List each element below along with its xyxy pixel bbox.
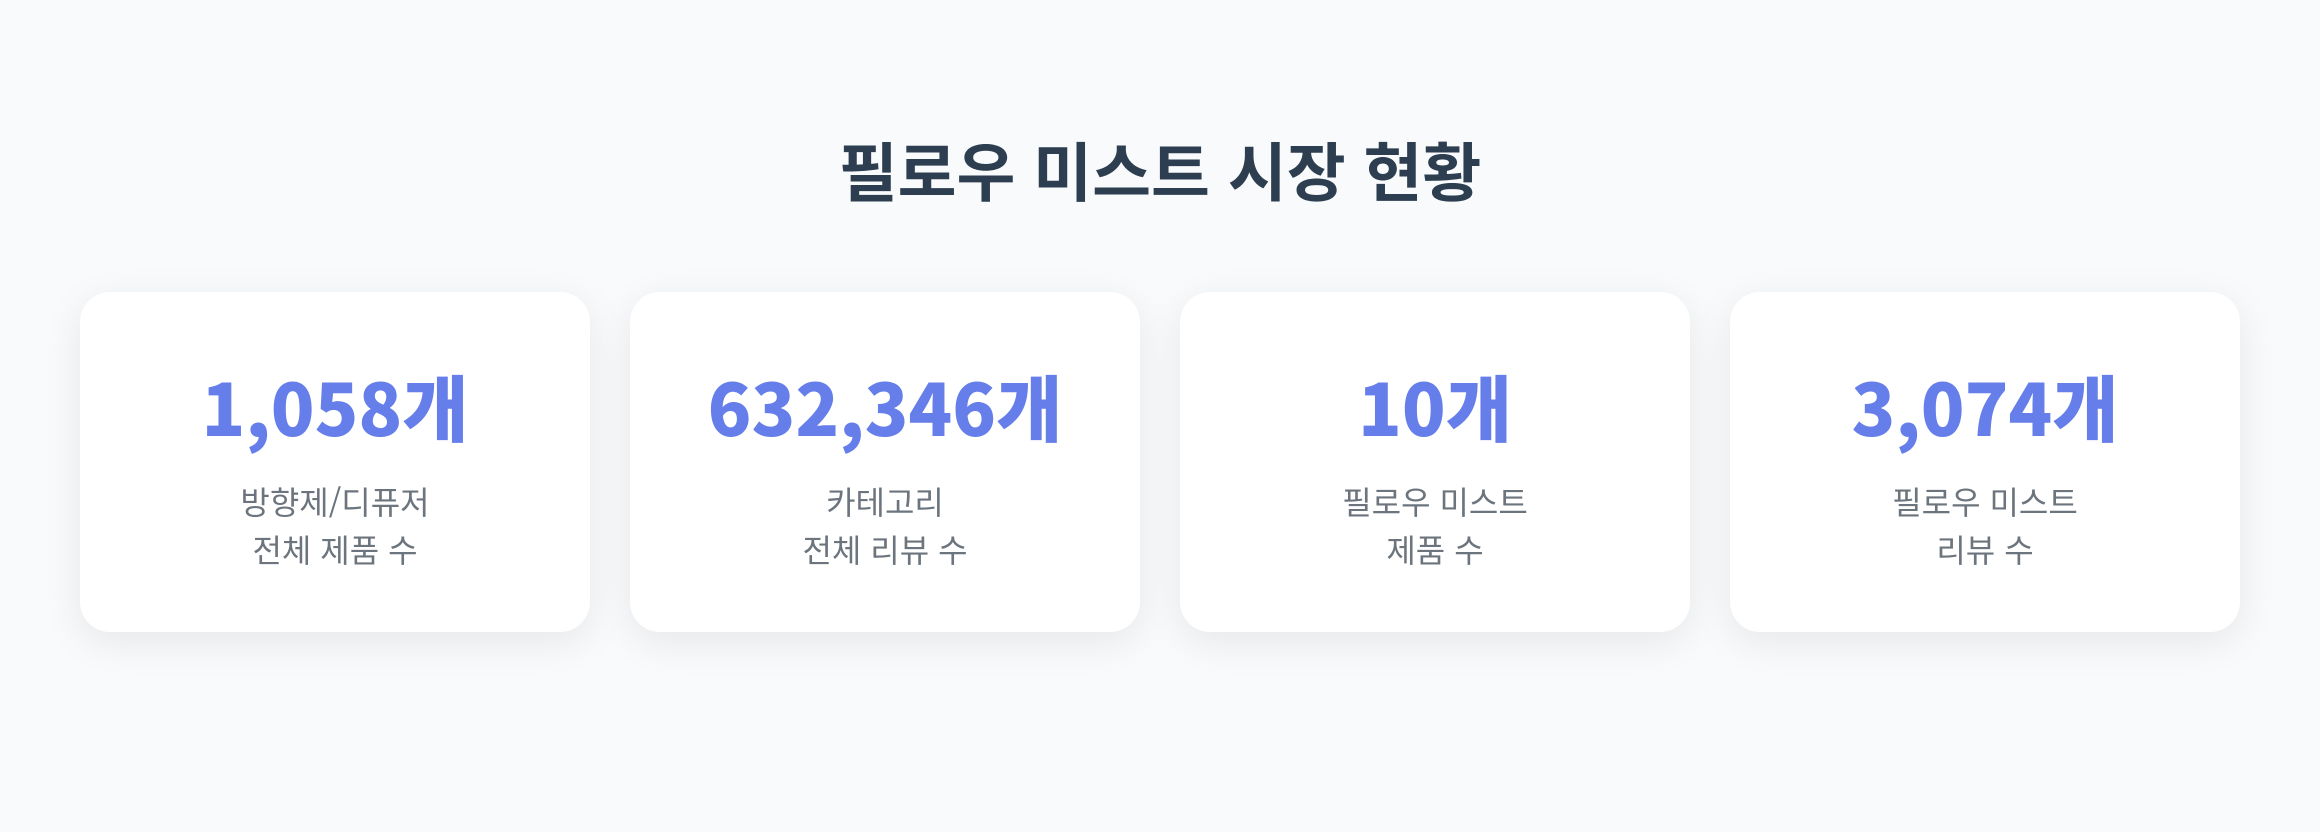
stat number: 1,058개 — [201, 352, 469, 457]
stat label: 필로우 미스트 — [1892, 478, 2078, 524]
panel: pillow mist reviews — [1730, 292, 2240, 632]
stat label — [1892, 478, 2078, 572]
stat label: 전체 제품 수 — [252, 526, 418, 572]
panel: total reviews — [630, 292, 1140, 632]
stat number: 3,074개 — [1851, 352, 2119, 457]
stat label: 필로우 미스트 — [1342, 478, 1528, 524]
stat label: 방향제/디퓨저 — [240, 478, 430, 524]
stat number: 10개 — [1358, 352, 1512, 457]
stat number: 632,346개 — [708, 352, 1062, 457]
panel: total products — [80, 292, 590, 632]
panel: pillow mist products — [1180, 292, 1690, 632]
stat label: 제품 수 — [1386, 526, 1484, 572]
stat label — [240, 478, 430, 572]
stat label: 카테고리 — [826, 478, 944, 524]
title: 필로우 미스트 시장 현황 — [839, 123, 1481, 215]
stat label: 전체 리뷰 수 — [802, 526, 968, 572]
stat label: 리뷰 수 — [1936, 526, 2034, 572]
stat label — [1342, 478, 1528, 572]
stat label — [802, 478, 968, 572]
